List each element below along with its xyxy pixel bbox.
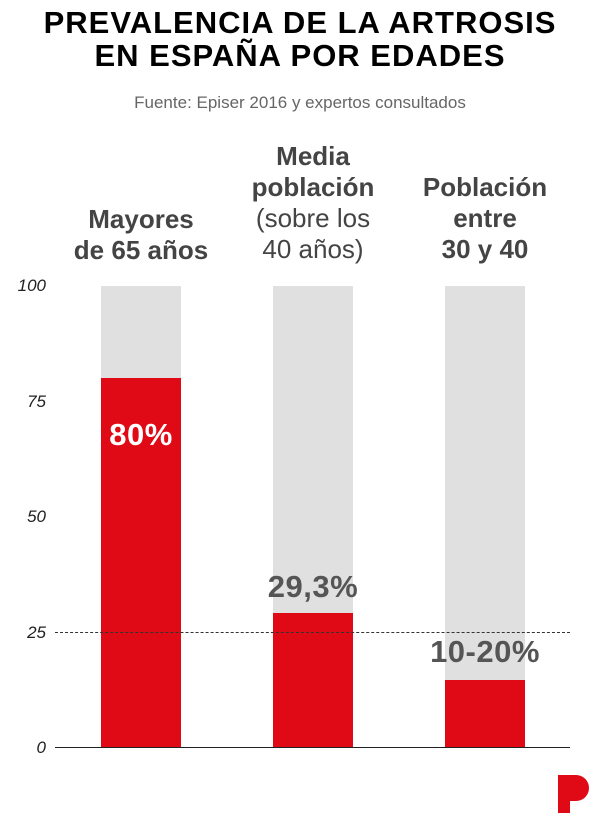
label: mayores — [74, 204, 208, 265]
label: media: 40 años) — [262, 234, 364, 264]
label: mayores: Mayores — [88, 204, 194, 234]
title: EN ESPAÑA POR EDADES — [94, 38, 506, 73]
label: 30-40: 30 y 40 — [442, 234, 528, 264]
chart — [18, 276, 570, 757]
label: 30-40: Población — [423, 172, 547, 202]
label: media: (sobre los — [256, 203, 370, 233]
label: 30-40: entre — [453, 203, 517, 233]
label: mayores: de 65 años — [74, 235, 208, 265]
axis labels: 0 — [37, 738, 46, 757]
bar: mayores — [101, 286, 181, 747]
source: Fuente: Episer 2016 y expertos consultados — [134, 93, 466, 112]
title — [44, 5, 556, 73]
axis labels — [18, 276, 46, 757]
axis labels: 100 — [18, 276, 46, 295]
bar: media: 29,3% — [268, 569, 358, 604]
label: 30-40 — [423, 172, 547, 264]
axis labels: 25 — [27, 623, 46, 642]
logo — [558, 775, 589, 813]
title: PREVALENCIA DE LA ARTROSIS — [44, 5, 556, 40]
bar: 30-40 — [430, 286, 540, 747]
bar: mayores: 80% — [109, 417, 173, 452]
axis labels: 75 — [27, 392, 46, 411]
bar: 30-40: 10-20% — [430, 634, 540, 669]
axis labels: 50 — [27, 507, 46, 526]
bar: media — [268, 286, 358, 747]
label: media: Media — [276, 141, 350, 171]
label: media — [252, 141, 374, 264]
label: media: población — [252, 172, 374, 202]
